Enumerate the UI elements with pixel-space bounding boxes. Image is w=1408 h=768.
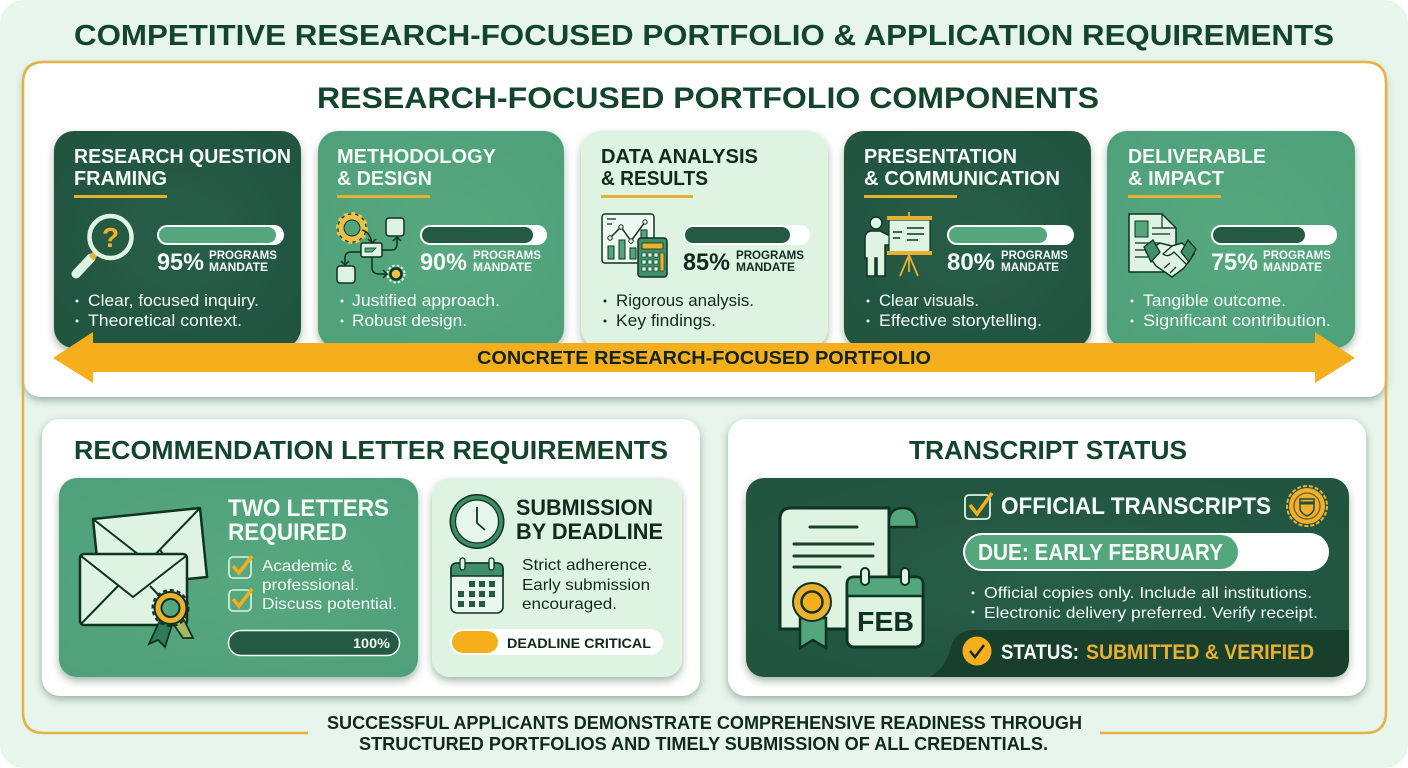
progress bar: 100%: 100% — [353, 636, 390, 651]
icon: checkboxes — [229, 556, 252, 611]
card: research question framing — [54, 131, 301, 348]
card: deliverable and impact: MANDATE — [1263, 262, 1322, 274]
card: data analysis and results: 85% — [683, 249, 730, 276]
icon: calendar — [451, 558, 503, 613]
card: presentation and communication: & COMMUNICATION — [864, 167, 1060, 190]
progress bar: 75% — [1211, 225, 1337, 245]
card: deliverable and impact: DELIVERABLE — [1128, 145, 1266, 168]
icon: envelopes with seal — [80, 508, 207, 647]
card: data analysis and results — [581, 131, 828, 348]
box: two letters required — [59, 478, 418, 677]
card: data analysis and results: Rigorous analysis. — [616, 292, 754, 310]
status: submitted and verified: STATUS: — [1001, 641, 1079, 664]
icon: diploma with FEB calendar: FEB — [857, 606, 914, 637]
progress bar: 80% — [947, 225, 1074, 245]
box: submission by deadline — [432, 478, 682, 677]
box: two letters required: Academic & — [262, 558, 353, 575]
card: data analysis and results: Key findings. — [616, 312, 716, 330]
box: submission by deadline: BY DEADLINE — [516, 519, 663, 544]
progress bar: 85% — [684, 225, 810, 245]
card: research question framing: 95% — [157, 249, 204, 276]
card: presentation and communication: Clear visuals. — [879, 292, 979, 310]
card: deliverable and impact — [1107, 131, 1355, 348]
icon: chart and calculator — [602, 214, 667, 277]
card: data analysis and results: PROGRAMS — [736, 250, 804, 262]
card: presentation and communication: PRESENTATION — [864, 145, 1017, 168]
icon: checked box — [965, 493, 992, 519]
panel: recommendation letter requirements — [42, 419, 700, 696]
box: submission by deadline: Early submission — [522, 577, 650, 594]
card: methodology and design: Robust design. — [352, 312, 467, 330]
card: methodology and design: 90% — [420, 249, 467, 276]
card: presentation and communication: PROGRAMS — [1001, 250, 1068, 262]
status: submitted and verified — [962, 636, 1314, 666]
icon: diploma with FEB calendar — [780, 508, 923, 648]
card: presentation and communication: Effective storytelling. — [879, 312, 1042, 330]
card: research question framing: FRAMING — [74, 167, 167, 190]
box: official transcripts: Official copies only. Include all institutions. — [984, 585, 1312, 602]
card: data analysis and results: DATA ANALYSIS — [601, 145, 758, 168]
icon: magnifier: ? — [102, 222, 119, 253]
heading: recommendation letters: RECOMMENDATION LETTER REQUIREMENTS — [74, 435, 668, 465]
card: deliverable and impact: PROGRAMS — [1263, 250, 1331, 262]
progress bar: due early february: DUE: EARLY FEBRUARY — [978, 539, 1223, 565]
heading: portfolio components: RESEARCH-FOCUSED PORTFOLIO COMPONENTS — [317, 82, 1099, 115]
progress bar: due early february — [963, 533, 1329, 571]
card: presentation and communication: MANDATE — [1001, 262, 1059, 274]
icon: presenter with board — [865, 212, 932, 276]
title: COMPETITIVE RESEARCH-FOCUSED PORTFOLIO & APPLICATION REQUIREMENTS — [74, 20, 1334, 52]
card: deliverable and impact: Tangible outcome. — [1143, 292, 1286, 310]
card: methodology and design: & DESIGN — [337, 167, 432, 190]
status pill: deadline critical: DEADLINE CRITICAL — [507, 635, 651, 651]
icon: magnifier — [76, 216, 132, 274]
card: research question framing: PROGRAMS — [209, 250, 277, 262]
card: deliverable and impact: & IMPACT — [1128, 167, 1224, 190]
card: methodology and design: Justified approach. — [352, 292, 500, 310]
card: presentation and communication — [844, 131, 1091, 348]
card: data analysis and results: MANDATE — [736, 262, 795, 274]
progress bar: 90% — [420, 225, 547, 245]
box: two letters required: Discuss potential. — [262, 596, 397, 613]
card: research question framing: MANDATE — [209, 262, 268, 274]
icon: gold badge — [1287, 486, 1327, 526]
progress bar: 95% — [157, 225, 284, 245]
status bar background — [930, 630, 1349, 677]
card: research question framing: RESEARCH QUESTION — [74, 145, 291, 168]
card: research question framing: Theoretical context. — [88, 312, 242, 330]
card: methodology and design: PROGRAMS — [473, 250, 541, 262]
box: two letters required: REQUIRED — [228, 519, 347, 546]
arrow: concrete research-focused portfolio: CONCRETE RESEARCH-FOCUSED PORTFOLIO — [477, 348, 931, 368]
card: research question framing: Clear, focused inquiry. — [88, 292, 259, 310]
card: deliverable and impact: Significant contribution. — [1143, 312, 1331, 330]
panel: portfolio components — [24, 63, 1385, 397]
status pill: deadline critical — [450, 629, 663, 655]
box: submission by deadline: SUBMISSION — [516, 495, 653, 520]
footer statement: SUCCESSFUL APPLICANTS DEMONSTRATE COMPREHENSIVE READINESS THROUGH — [327, 713, 1082, 733]
box: two letters required: TWO LETTERS — [228, 495, 389, 522]
panel: transcript status — [728, 419, 1366, 696]
footer statement — [327, 713, 1082, 754]
box: submission by deadline: Strict adherence. — [522, 557, 652, 574]
icon: clock — [450, 494, 504, 549]
card: methodology and design — [318, 131, 564, 348]
card: data analysis and results: & RESULTS — [601, 167, 708, 190]
box: official transcripts: OFFICIAL TRANSCRIPTS — [1001, 493, 1271, 520]
status: submitted and verified: SUBMITTED & VERIFIED — [1086, 641, 1314, 664]
card: methodology and design: MANDATE — [473, 262, 532, 274]
card: presentation and communication: 80% — [947, 249, 995, 276]
box: official transcripts: Electronic delivery preferred. Verify receipt. — [984, 605, 1318, 622]
arrow: concrete research-focused portfolio — [53, 332, 1355, 383]
footer statement: STRUCTURED PORTFOLIOS AND TIMELY SUBMISSION OF ALL CREDENTIALS. — [359, 734, 1048, 754]
card: deliverable and impact: 75% — [1211, 249, 1258, 276]
heading: transcript status: TRANSCRIPT STATUS — [909, 435, 1187, 465]
card: methodology and design: METHODOLOGY — [337, 145, 496, 168]
icon: workflow gears — [337, 214, 404, 283]
progress bar: 100% — [228, 630, 400, 656]
box: two letters required: professional. — [262, 577, 359, 594]
box: official transcripts — [746, 478, 1349, 677]
box: submission by deadline: encouraged. — [522, 596, 617, 613]
icon: document and handshake — [1129, 214, 1196, 277]
